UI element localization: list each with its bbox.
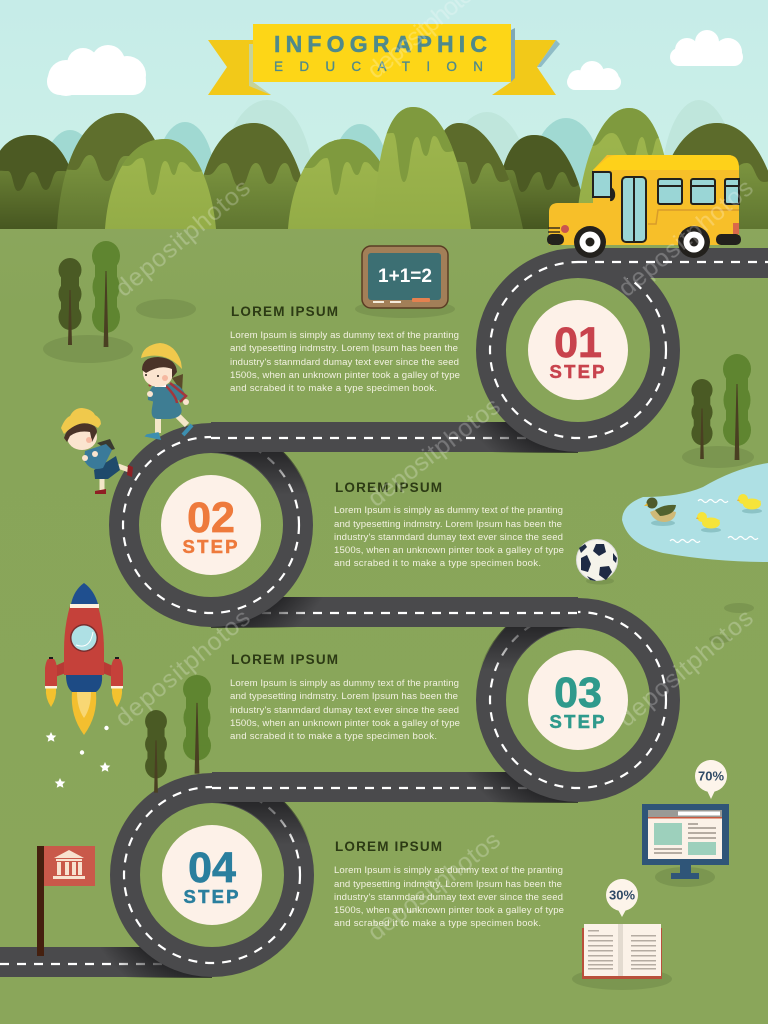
pale distant hills: [220, 100, 737, 292]
icon: monitor with 70% bubble: [642, 760, 729, 887]
hill light left: [105, 139, 216, 229]
text: depositphotos: [613, 604, 759, 733]
text block 1: industry's stanmdard dumay text ever since the seed: [230, 357, 459, 368]
icon: open book with 30% bubble: [572, 879, 672, 990]
text block 2: [334, 480, 564, 569]
child walking on road: [141, 343, 192, 439]
text block 4: and typesetting indmstry. Lorem Ipsum has been the: [334, 879, 562, 890]
text block 2: LOREM IPSUM: [335, 480, 442, 495]
text block 4: industry's stanmdard dumay text ever since the seed: [334, 892, 563, 903]
icon: school bus: [547, 155, 741, 258]
hill dark centre: [204, 123, 301, 229]
text: depositphotos: [362, 826, 506, 947]
bubble 70%: 70%: [698, 768, 724, 784]
text: depositphotos: [110, 174, 256, 303]
text block 4: LOREM IPSUM: [335, 839, 442, 854]
text block 2: Lorem Ipsum is simply as dummy text of the pranting: [334, 505, 563, 516]
text block 3: and scrabed it to make a type specimen book.: [230, 731, 437, 742]
text block 1: LOREM IPSUM: [231, 304, 338, 319]
text block 4: [334, 839, 564, 929]
hill mid far right: [578, 108, 664, 203]
text block 2: industry's stanmdard dumay text ever since the seed: [334, 532, 563, 543]
cloud left: [47, 45, 146, 96]
hills range: [0, 100, 768, 229]
hill light centre: [288, 139, 380, 229]
step 1 badge: [528, 300, 628, 400]
text block 3: 1500s, when an unknown pinter took a galley of type: [230, 718, 460, 729]
text block 1: 1500s, when an unknown pinter took a galley of type: [230, 370, 460, 381]
duck: yellow front: [696, 512, 721, 532]
trees beside rocket: [145, 675, 211, 793]
text block 2: 1500s, when an unknown pinter took a galley of type: [334, 545, 564, 556]
trees top left: [58, 241, 120, 347]
icon: blackboard: [355, 246, 455, 318]
text block 4: Lorem Ipsum is simply as dummy text of the pranting: [334, 865, 563, 876]
hill dark far right: [672, 123, 768, 229]
text block 1: and typesetting indmstry. Lorem Ipsum has been the: [230, 343, 458, 354]
ground: [0, 229, 768, 1024]
child running: [61, 408, 133, 494]
step 4 badge: STEP: [184, 886, 238, 907]
step 3 badge: [528, 650, 628, 750]
road winding through four loops: [0, 216, 768, 1009]
text: depositphotos: [362, 392, 506, 513]
step 2 badge: [161, 475, 261, 575]
step 1 badge: STEP: [550, 361, 604, 382]
text block 3: and typesetting indmstry. Lorem Ipsum has been the: [230, 691, 458, 702]
cloud right small: [567, 61, 621, 90]
background sky: [0, 0, 768, 232]
duck: mallard: [644, 498, 676, 526]
hill dark far right of centre: [504, 135, 580, 229]
pond: [622, 463, 768, 562]
subtitle text: EDUCATION: [274, 59, 483, 74]
text block 1: Lorem Ipsum is simply as dummy text of the pranting: [230, 330, 459, 341]
text block 2: and typesetting indmstry. Lorem Ipsum has been the: [334, 519, 562, 530]
text block 1: and scrabed it to make a type specimen book.: [230, 383, 437, 394]
bubble 30%: 30%: [609, 888, 635, 902]
ground shadows: [43, 299, 754, 643]
text block 4: 1500s, when an unknown pinter took a galley of type: [334, 905, 564, 916]
icon: soccer ball: [576, 540, 618, 584]
icon: rocket: [45, 583, 123, 735]
icon: blackboard: 1+1=2: [378, 266, 432, 287]
duck: yellow back: [737, 494, 762, 514]
text block 3: [230, 652, 460, 742]
step 4 badge: 04: [188, 844, 236, 892]
hill tall centre: [378, 107, 471, 229]
text block 2: and scrabed it to make a type specimen book.: [334, 558, 541, 569]
teal distant hills: [40, 118, 601, 250]
hill dark left: [0, 135, 68, 229]
water ripples: [670, 500, 758, 542]
step 2 badge: STEP: [182, 536, 238, 557]
cloud right top: [670, 30, 743, 66]
step 3 badge: STEP: [550, 711, 604, 732]
icon: flag with building: [37, 846, 95, 956]
text: depositphotos: [613, 174, 759, 303]
trees right by pond: [682, 354, 754, 468]
text: depositphotos: [110, 604, 256, 733]
text block 3: LOREM IPSUM: [231, 652, 338, 667]
hill dark right of centre: [444, 123, 523, 229]
step 3 badge: 03: [554, 669, 602, 717]
step 1 badge: 01: [554, 319, 602, 367]
text block 4: and scrabed it to make a type specimen book.: [334, 918, 541, 929]
stars below rocket: [46, 726, 110, 788]
text block 1: [230, 304, 460, 394]
step 4 badge: [162, 825, 262, 925]
text block 3: industry's stanmdard dumay text ever since the seed: [230, 705, 459, 716]
icon: museum building: [53, 850, 85, 879]
title ribbon: [208, 24, 560, 95]
hill mid left: [57, 113, 155, 229]
step 2 badge: 02: [187, 494, 235, 542]
title text: INFOGRAPHIC: [274, 31, 487, 57]
text block 3: Lorem Ipsum is simply as dummy text of the pranting: [230, 678, 459, 689]
